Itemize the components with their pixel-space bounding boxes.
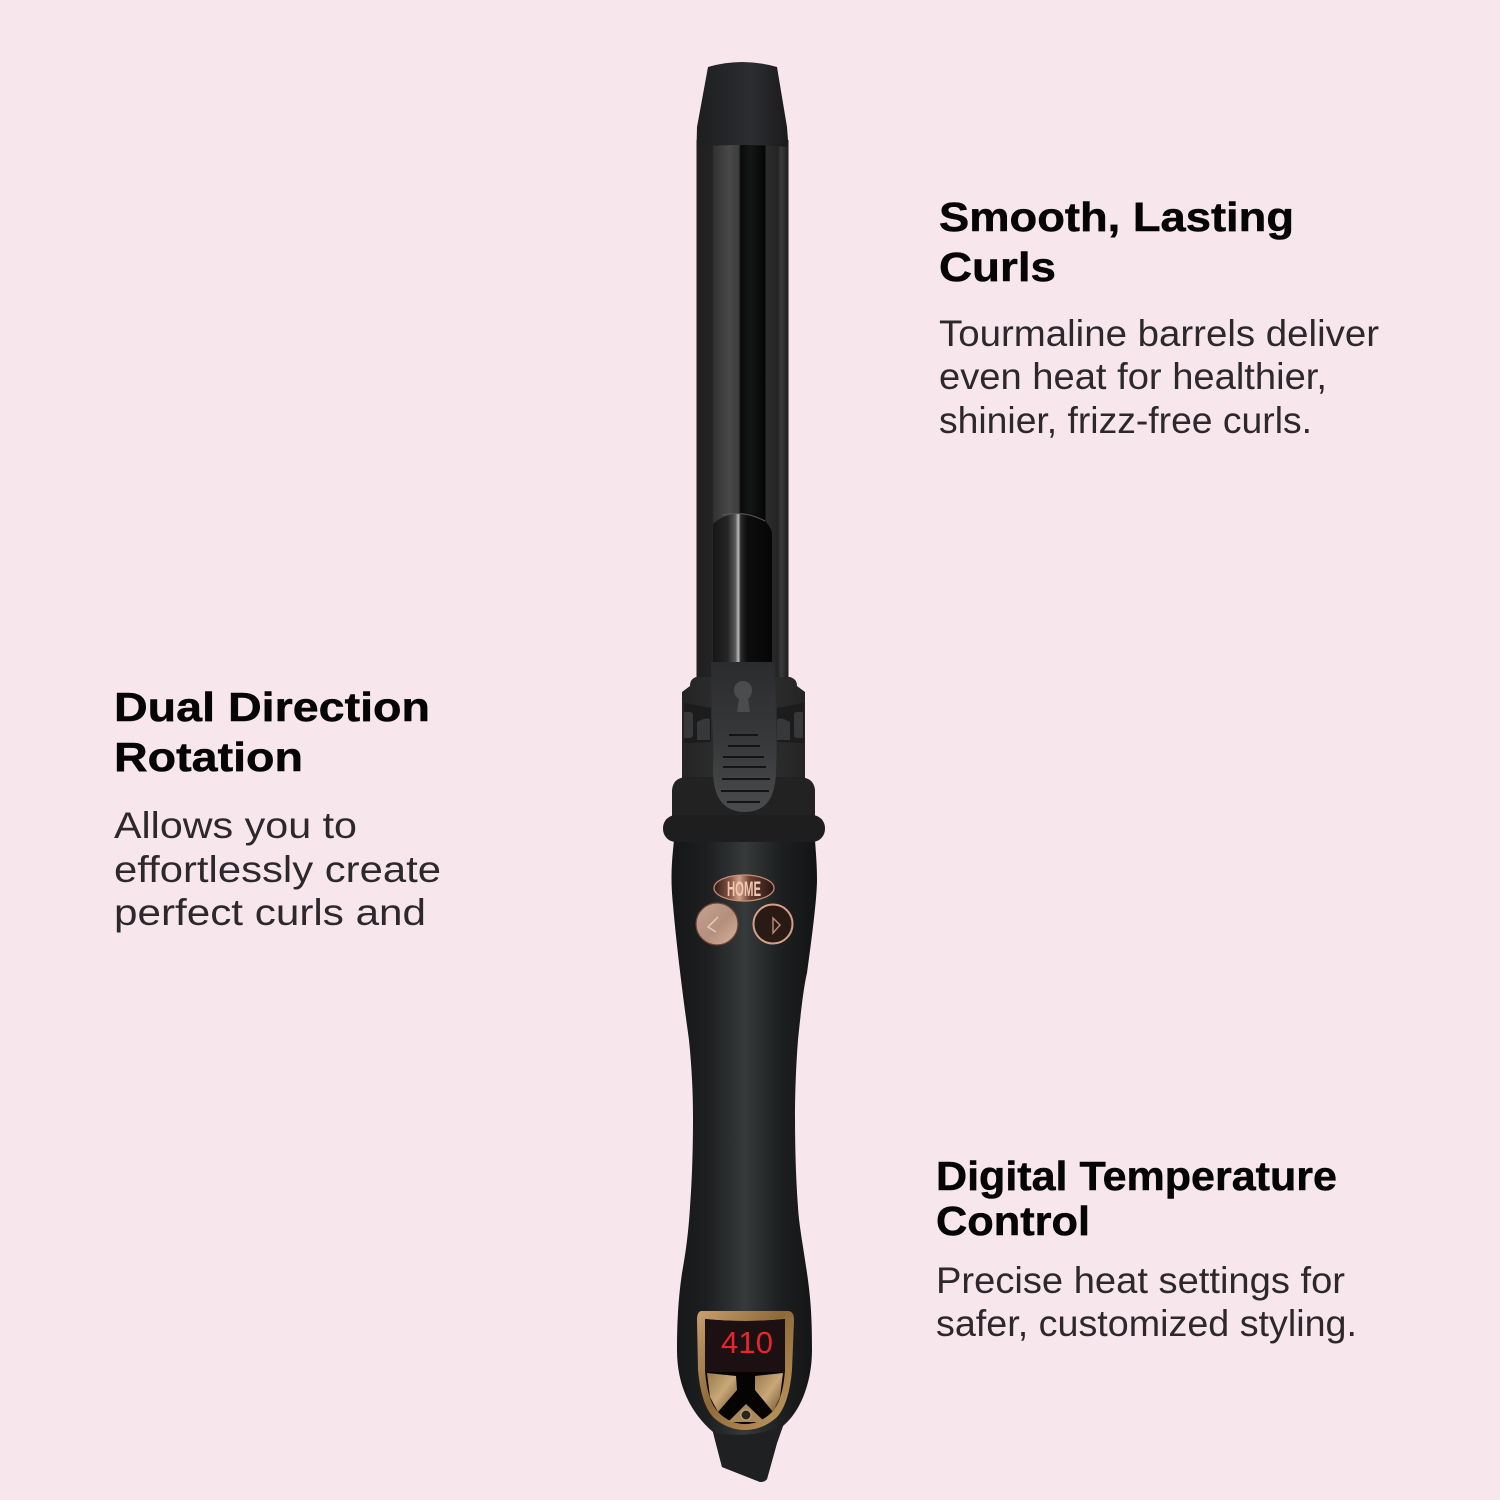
grip ridges [721,735,770,802]
barrel [696,140,788,685]
nozzle shade [713,1426,783,1482]
home button [714,875,774,901]
right arrow button [754,904,792,944]
barrel clamp with highlight [713,513,772,665]
rotation clip lever [711,662,776,812]
right side knob [777,703,804,743]
lower ring [663,815,825,842]
feature: digital temperature control [936,1153,1357,1344]
digital control panel [697,1311,794,1430]
left arrow button [696,903,738,945]
handle body [672,840,817,1482]
heading [936,1153,1337,1244]
body text: Precise heat settings for [936,1259,1345,1301]
body text: perfect curls and [114,891,426,933]
rotating collar [663,677,825,842]
keyhole [734,681,752,712]
minus button [707,1373,737,1412]
heading [939,194,1294,290]
body text [936,1259,1357,1344]
right knob detail [777,712,803,740]
body text [114,804,441,933]
body text: even heat for healthier, [939,355,1327,397]
left knob detail [684,712,710,740]
cool tip [696,62,788,147]
feature: smooth, lasting curls [939,194,1379,441]
body text: effortlessly create [114,848,441,890]
heading: Control [936,1198,1090,1244]
heading: Digital Temperature [936,1153,1337,1199]
display screen [705,1319,785,1372]
body text [939,312,1379,441]
heading: Curls [939,244,1056,290]
heading: Smooth, Lasting [939,194,1294,240]
upper ring [672,777,815,820]
body text: safer, customized styling. [936,1302,1357,1344]
heading: Dual Direction [114,684,430,730]
collar neck [682,677,805,785]
gold frame [697,1311,794,1430]
power button [728,1404,765,1422]
left side knob [684,703,711,743]
feature: dual direction rotation [114,684,441,933]
home button: HOME [727,878,761,901]
product: rotating curling iron [663,62,825,1482]
panel black inner [705,1319,785,1424]
body text: shinier, frizz-free curls. [939,399,1312,441]
heading: Rotation [114,734,303,780]
body text: Allows you to [114,804,357,846]
plus button [755,1373,783,1412]
heading [114,684,430,780]
temperature readout: 410 [721,1325,773,1360]
body text: Tourmaline barrels deliver [939,312,1379,354]
